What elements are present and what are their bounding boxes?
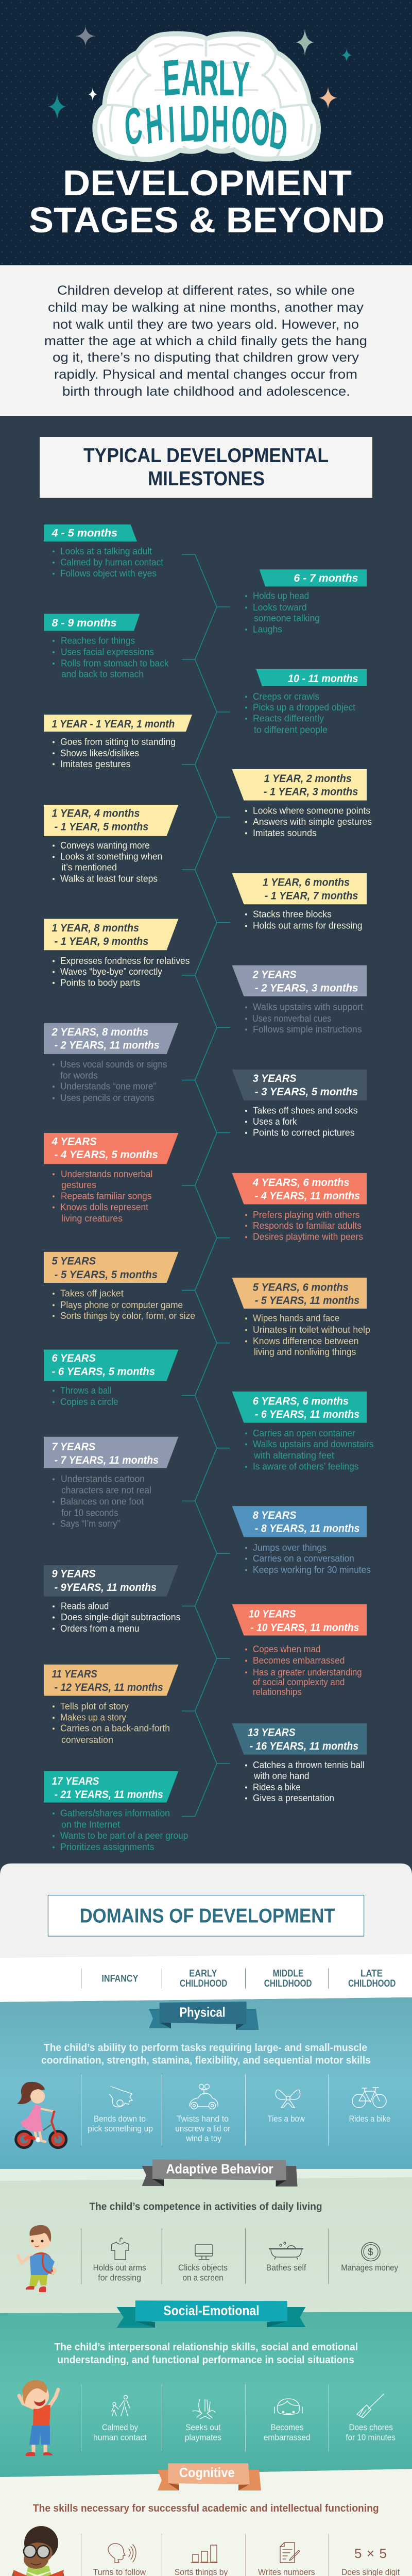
milestone: 4 years 6 months: Desires playtime with peers [253, 1232, 363, 1242]
milestone: 6-7 months: someone talking [254, 613, 320, 623]
milestone: 13 years: with one hand [253, 1771, 309, 1781]
intro text block: og it, there’s no disputing that children grow very [53, 350, 359, 365]
illustration: boy with backpack [18, 2225, 56, 2292]
heading: typical developmental milestones: TYPICAL DEVELOPMENTAL [83, 445, 329, 467]
milestone: 1 year 6 months: 1 YEAR, 6 months [263, 877, 350, 889]
icon: bike [352, 2088, 386, 2108]
milestone: 4 years [44, 1133, 178, 1224]
milestone: 5 years: Sorts things by color, form, or size [60, 1311, 195, 1321]
title: Early Childhood [123, 48, 289, 163]
intro text block: child may be walking at nine months, another may [48, 300, 364, 315]
text: social-emotional description [55, 2342, 358, 2366]
milestone: 3 years [232, 1070, 367, 1138]
milestone: 3 years: 3 YEARS [253, 1073, 297, 1084]
intro text block: birth through late childhood and adolescence. [62, 384, 350, 399]
milestone: 10 years: 10 YEARS [249, 1608, 296, 1620]
milestone: 6 years 6 months: Is aware of others’ feelings [253, 1462, 358, 1472]
milestone: 7 years: - 7 YEARS, 11 months [55, 1454, 159, 1466]
labels: social-emotional milestones: Does chores [349, 2422, 393, 2432]
milestone: 7 years: Balances on one foot [60, 1496, 144, 1506]
milestone: 10-11 months: Reacts differently [253, 713, 324, 723]
milestone: 2 years 8 months: Understands “one more” [60, 1081, 156, 1092]
ribbon: social-emotional: Social-Emotional [163, 2302, 260, 2318]
milestone: 4-5 months [44, 524, 163, 579]
milestone: 5 years [44, 1252, 195, 1321]
milestone: 4-5 months: Calmed by human contact [60, 557, 163, 568]
milestone: 10-11 months: 10 - 11 months [288, 673, 358, 685]
text: social-emotional description: The child’s interpersonal relationship skills, social and emotional [55, 2342, 358, 2353]
labels: physical milestones: Bends down to [94, 2114, 146, 2124]
labels: physical milestones: pick something up [88, 2124, 153, 2133]
milestone: 5 years 6 months: Knows difference between [253, 1336, 358, 1346]
milestone: 1 year - 1 year 1 month: Shows likes/dislikes [60, 748, 139, 758]
ribbon: cognitive [158, 2463, 261, 2490]
milestone: 1 year 2 months: Answers with simple gestures [253, 817, 372, 827]
milestone: 13 years [232, 1723, 367, 1803]
milestone: 4-5 months: 4 - 5 months [51, 528, 117, 539]
labels: adaptive milestones: on a screen [183, 2273, 224, 2282]
text: adaptive description: The child’s competence in activities of daily living [90, 2201, 322, 2213]
milestone: 1 year 6 months: - 1 YEAR, 7 months [265, 890, 358, 902]
milestone: 13 years: Catches a thrown tennis ball [253, 1760, 365, 1770]
milestone: 5 years 6 months: - 5 YEARS, 11 months [255, 1295, 359, 1307]
illustration: cheering boy [19, 2380, 58, 2456]
intro text block: not walk until they are two years old. However, no [53, 317, 359, 332]
milestone: 13 years: Gives a presentation [253, 1793, 334, 1803]
milestone: 17 years: Wants to be part of a peer group [60, 1831, 188, 1841]
milestone: 10-11 months: Picks up a dropped object [253, 702, 355, 713]
milestone: 13 years: Rides a bike [253, 1782, 301, 1792]
milestone: 10-11 months: Creeps or crawls [253, 691, 319, 702]
milestone: 11 years: - 12 YEARS, 11 months [55, 1682, 163, 1693]
intro text block: matter the age at which a child finally gets the hang [44, 334, 367, 348]
milestone: 2 years [232, 965, 367, 1035]
milestone: 6 years 6 months: Carries an open container [253, 1428, 355, 1438]
text: physical description: coordination, strength, stamina, flexibility, and sequential motor skills [41, 2055, 371, 2066]
milestone: 17 years: Gathers/shares information [60, 1808, 170, 1818]
milestone: 2 years 8 months: Uses pencils or crayons [60, 1093, 154, 1103]
milestone: 7 years: for 10 seconds [61, 1507, 118, 1518]
milestone: 6-7 months: Looks toward [253, 602, 307, 613]
milestone: 1 year 4 months: Walks at least four steps [60, 874, 158, 884]
icon: wind-up car [190, 2084, 218, 2109]
column headers: INFANCY [101, 1973, 139, 1984]
illustration: boy reading [9, 2526, 67, 2576]
milestone: 4 years: Knows dolls represent [60, 1202, 148, 1212]
intro text block [0, 265, 412, 416]
icon: bow [276, 2090, 300, 2108]
milestone: 5 years 6 months [232, 1278, 370, 1357]
labels: adaptive milestones: Manages money [341, 2263, 398, 2273]
title: Early Childhood: EARLY [162, 48, 250, 108]
milestone: 4 years: Repeats familiar songs [61, 1191, 151, 1201]
milestone: 2 years: 2 YEARS [252, 969, 297, 981]
milestone: 6 years: 6 YEARS [52, 1352, 96, 1364]
milestone: 4 years 6 months: 4 YEARS, 6 months [252, 1177, 350, 1189]
milestone: 9 years: 9 YEARS [52, 1568, 96, 1580]
milestone: 1 year 8 months: Expresses fondness for relatives [60, 956, 190, 966]
milestone: 4 years: 4 YEARS [52, 1136, 97, 1147]
icon: hands together [193, 2399, 215, 2419]
milestone: 8 years: Keeps working for 30 minutes [253, 1565, 371, 1575]
milestone: 8 years: Carries on a conversation [253, 1553, 354, 1564]
milestone: 13 years: 13 YEARS [248, 1727, 296, 1739]
milestone: 1 year 4 months: Conveys wanting more [60, 840, 150, 851]
panel: typical developmental milestones [0, 416, 412, 1870]
ribbon: physical: Physical [179, 2005, 226, 2020]
milestone: 1 year 6 months [232, 873, 367, 931]
icon: sparkles [48, 26, 352, 120]
milestone: 17 years [44, 1771, 188, 1852]
milestone: 1 year 2 months: Looks where someone points [253, 806, 370, 816]
milestone: 1 year 6 months: Stacks three blocks [253, 909, 332, 919]
milestone: 4 years: gestures [61, 1180, 96, 1190]
milestone: 8 years: 8 YEARS [253, 1510, 297, 1521]
milestone: 11 years: Carries on a back-and-forth [60, 1723, 170, 1734]
text: social-emotional description: understanding, and functional performance in social situations [57, 2354, 354, 2366]
milestone: 5 years 6 months: Wipes hands and face [253, 1313, 339, 1324]
milestone: 4 years: living creatures [61, 1213, 123, 1224]
milestone: 5 years 6 months: Urinates in toilet without help [253, 1325, 370, 1335]
icon: embarrassed face [274, 2399, 302, 2414]
ribbon: social-emotional [116, 2300, 305, 2328]
section: social-emotional [0, 2300, 412, 2477]
milestone: 11 years: Makes up a story [60, 1713, 126, 1723]
milestone: 2 years: - 2 YEARS, 3 months [255, 982, 358, 994]
milestone: 1 year 8 months: - 1 YEAR, 9 months [55, 936, 148, 947]
milestone: 1 year 8 months: Waves “bye-bye” correctly [60, 967, 162, 977]
milestone: 1 year - 1 year 1 month: 1 YEAR - 1 YEAR, 1 month [52, 718, 175, 730]
labels: physical milestones: Rides a bike [349, 2114, 390, 2124]
ribbon: adaptive behavior [142, 2160, 298, 2187]
milestone: 17 years: 17 YEARS [52, 1775, 99, 1787]
milestone: 2 years: Walks upstairs with support [253, 1002, 363, 1012]
milestone: 11 years: Tells plot of story [60, 1701, 129, 1711]
ribbon: adaptive behavior: Adaptive Behavior [166, 2161, 273, 2176]
milestone: 9 years [44, 1565, 180, 1634]
milestone: 1 year 2 months: 1 YEAR, 2 months [264, 773, 352, 785]
milestone: 8-9 months: 8 - 9 months [52, 617, 116, 629]
milestone: 4 years: Understands nonverbal [61, 1169, 152, 1179]
icon: coin [362, 2243, 380, 2261]
milestone: 8-9 months: and back to stomach [61, 669, 144, 680]
milestone: 4 years: - 4 YEARS, 5 months [55, 1149, 158, 1161]
milestone: 3 years: Points to correct pictures [253, 1127, 355, 1138]
heading: typical developmental milestones: MILESTONES [148, 468, 265, 490]
column headers: CHILDHOOD [264, 1978, 312, 1989]
milestone: 17 years: Prioritizes assignments [60, 1842, 154, 1852]
milestone: 17 years: - 21 YEARS, 11 months [55, 1789, 163, 1801]
header panel [0, 0, 412, 265]
milestone: 2 years 8 months: for words [60, 1071, 98, 1081]
milestone: 5 years: Plays phone or computer game [60, 1300, 183, 1310]
panel: domains of development [0, 1863, 412, 2576]
icon: turns to noise [108, 2544, 136, 2563]
milestone: 1 year 4 months: Looks at something when [60, 852, 162, 862]
milestone: 6 years 6 months: - 6 YEARS, 11 months [255, 1409, 359, 1420]
milestone: 1 year 4 months: - 1 YEAR, 5 months [55, 821, 148, 833]
milestone: 11 years: conversation [61, 1735, 113, 1745]
milestone: 4 years 6 months: Prefers playing with others [253, 1210, 359, 1220]
milestone: 7 years: 7 YEARS [52, 1441, 95, 1453]
milestone: 8-9 months: Rolls from stomach to back [61, 658, 169, 668]
title: Development Stages & Beyond [29, 163, 385, 240]
milestone: 13 years: - 16 YEARS, 11 months [250, 1740, 358, 1752]
milestone: 1 year 2 months: Imitates sounds [253, 828, 317, 838]
section: adaptive behavior [0, 2160, 412, 2314]
milestone: 1 year 4 months: 1 YEAR, 4 months [52, 808, 140, 820]
milestone: 2 years: Uses nonverbal cues [252, 1013, 331, 1024]
milestone: 1 year 8 months [44, 919, 190, 988]
milestone: 6 years 6 months: Walks upstairs and downstairs [253, 1439, 374, 1449]
milestone: 1 year 2 months [232, 769, 372, 838]
milestone: 10 years: of social complexity and [253, 1677, 345, 1687]
labels: social-emotional milestones: Becomes [271, 2422, 303, 2432]
milestone: 10 years: Becomes embarrassed [253, 1655, 345, 1666]
milestone: 10 years: - 10 YEARS, 11 months [250, 1622, 359, 1634]
icon: coin: $ [368, 2247, 373, 2258]
milestone: 8 years: - 8 YEARS, 11 months [255, 1523, 359, 1535]
milestone: 6 years: - 6 YEARS, 5 months [52, 1366, 155, 1378]
milestone: 8-9 months [44, 614, 169, 680]
milestone: 3 years: - 3 YEARS, 5 months [255, 1086, 358, 1098]
milestone: 10-11 months [245, 669, 367, 735]
labels: cognitive milestones [93, 2567, 400, 2576]
intro text block: Children develop at different rates, so while one [57, 283, 355, 298]
milestone: 2 years 8 months: - 2 YEARS, 11 months [55, 1040, 160, 1052]
milestone: 7 years: characters are not real [61, 1485, 151, 1496]
column headers: CHILDHOOD [180, 1978, 227, 1989]
column headers: LATE [360, 1969, 383, 1979]
labels: physical milestones [88, 2114, 390, 2143]
milestone: 4 years 6 months: - 4 YEARS, 11 months [255, 1190, 360, 1202]
labels: adaptive milestones: for dressing [98, 2273, 141, 2282]
labels: physical milestones: Twists hand to [177, 2114, 229, 2124]
milestone: 4-5 months: Follows object with eyes [60, 568, 157, 579]
icon: shirt [111, 2238, 129, 2260]
icon: broom [357, 2394, 384, 2418]
timeline connector [182, 554, 230, 1816]
labels: social-emotional milestones [93, 2422, 396, 2442]
milestone: 6 years [44, 1350, 178, 1407]
icon: monitor [195, 2245, 213, 2260]
milestone: 4 years 6 months: Responds to familiar adults [253, 1221, 362, 1231]
milestone: 8 years: Jumps over things [253, 1543, 327, 1553]
text: physical description [41, 2042, 371, 2066]
milestone: 6 years 6 months [232, 1392, 374, 1472]
labels: physical milestones: wind a toy [185, 2133, 221, 2143]
milestone: 5 years: Takes off jacket [60, 1288, 124, 1298]
heading: typical developmental milestones [40, 437, 372, 498]
milestone: 1 year 6 months: Holds out arms for dressing [253, 921, 363, 931]
milestone: 10 years: Has a greater understanding [253, 1667, 362, 1677]
milestone: 5 years 6 months: 5 YEARS, 6 months [253, 1281, 349, 1293]
milestone: 8-9 months: Reaches for things [61, 636, 135, 646]
title: Development Stages & Beyond: STAGES & BEYOND [29, 200, 385, 240]
milestone: 9 years: Does single-digit subtractions [61, 1612, 180, 1622]
milestone: 5 years 6 months: living and nonliving things [254, 1347, 356, 1357]
milestone: 3 years: Uses a fork [253, 1116, 297, 1127]
column headers [0, 1954, 412, 2002]
milestone: 1 year - 1 year 1 month: Imitates gestures [60, 759, 131, 769]
milestone: 7 years [44, 1437, 178, 1529]
milestone: 6 years 6 months: with alternating feet [253, 1450, 334, 1461]
milestone: 8-9 months: Uses facial expressions [61, 647, 154, 657]
milestone: 6-7 months: Laughs [253, 624, 282, 635]
milestone: 1 year 4 months [44, 805, 178, 884]
icon: parent and child [112, 2396, 130, 2416]
milestone: 6-7 months: 6 - 7 months [294, 572, 358, 584]
milestone: 6 years: Copies a circle [60, 1397, 118, 1407]
milestone: 9 years: - 9YEARS, 11 months [55, 1582, 157, 1594]
section: cognitive [0, 2463, 412, 2576]
column headers: CHILDHOOD [348, 1978, 396, 1989]
milestone: 9 years: Reads aloud [61, 1601, 109, 1612]
milestone: 6-7 months [245, 569, 367, 635]
icon: sized bars [191, 2545, 217, 2563]
milestone: 6 years 6 months: 6 YEARS, 6 months [253, 1395, 349, 1407]
milestone: 1 year 8 months: 1 YEAR, 8 months [52, 922, 139, 934]
milestone: 1 year 8 months: Points to body parts [60, 977, 140, 988]
ribbon: physical [149, 2002, 259, 2030]
text: cognitive description: The skills necessary for successful academic and intellectual functioning [33, 2503, 379, 2514]
milestone: 2 years 8 months: 2 YEARS, 8 months [52, 1026, 148, 1038]
column headers: MIDDLE [273, 1969, 303, 1979]
milestone: 3 years: Takes off shoes and socks [253, 1106, 357, 1116]
icon: multiplication: 5 × 5 [354, 2546, 387, 2561]
milestone: 2 years: Follows simple instructions [253, 1024, 362, 1035]
section: physical [0, 1997, 412, 2170]
milestone: 17 years: on the Internet [61, 1820, 120, 1830]
milestone: 4 years 6 months [232, 1173, 367, 1242]
labels: adaptive milestones: Clicks objects [178, 2263, 228, 2273]
labels: social-emotional milestones: human contact [93, 2432, 147, 2442]
heading: domains of development [48, 1895, 364, 1936]
milestone: 11 years [44, 1665, 178, 1745]
labels: social-emotional milestones: for 10 minutes [346, 2432, 396, 2442]
column headers: EARLY [189, 1969, 217, 1979]
milestone: 1 year 2 months: - 1 YEAR, 3 months [264, 786, 358, 798]
icon: bathtub [269, 2242, 303, 2259]
labels: social-emotional milestones: embarrassed [264, 2432, 311, 2442]
icon: document and pencil [280, 2543, 300, 2563]
labels: social-emotional milestones: Calmed by [102, 2422, 138, 2432]
milestone: 6 years: Throws a ball [60, 1385, 112, 1396]
milestone: 1 year - 1 year 1 month [44, 715, 192, 769]
milestone: 7 years: Says “I’m sorry” [60, 1518, 120, 1529]
labels: social-emotional milestones: playmates [185, 2432, 221, 2442]
labels: physical milestones: unscrew a lid or [175, 2124, 231, 2133]
illustration: girl on bike [14, 2082, 67, 2149]
labels: adaptive milestones [93, 2263, 398, 2282]
milestone: 10 years [232, 1604, 367, 1697]
labels: social-emotional milestones: Seeks out [185, 2422, 221, 2432]
milestone: 2 years 8 months: Uses vocal sounds or signs [60, 1059, 167, 1070]
milestone: 8 years [232, 1506, 371, 1575]
labels: adaptive milestones: Bathes self [266, 2263, 306, 2273]
milestone: 5 years: - 5 YEARS, 5 months [55, 1269, 158, 1281]
milestone: 1 year - 1 year 1 month: Goes from sitting to standing [60, 737, 176, 747]
milestone: 4-5 months: Looks at a talking adult [60, 546, 152, 556]
milestone: 10 years: Copes when mad [253, 1644, 320, 1654]
icon: bends down [109, 2087, 132, 2107]
milestone: 5 years: 5 YEARS [52, 1255, 96, 1267]
milestone: 11 years: 11 YEARS [52, 1668, 97, 1680]
heading: domains of development: DOMAINS OF DEVELOPMENT [80, 1905, 335, 1927]
milestone: 1 year 4 months: it’s mentioned [61, 862, 117, 873]
milestone: 9 years: Orders from a menu [60, 1623, 139, 1634]
ribbon: cognitive: Cognitive [179, 2465, 235, 2480]
intro text block: rapidly. Physical and mental changes occur from [54, 367, 357, 382]
milestone: 7 years: Understands cartoon [61, 1474, 145, 1484]
labels: adaptive milestones: Holds out arms [93, 2263, 146, 2273]
milestone: 2 years 8 months [44, 1023, 178, 1103]
title: Early Childhood: CHILDHOOD [123, 93, 289, 163]
milestone: 10-11 months: to different people [254, 725, 328, 735]
title: Development Stages & Beyond: DEVELOPMENT [63, 163, 352, 203]
labels: physical milestones: Ties a bow [267, 2114, 305, 2124]
milestone: 10 years: relationships [253, 1687, 302, 1697]
text: physical description: The child’s ability to perform tasks requiring large- and small-muscle [44, 2042, 367, 2054]
icon: brain [92, 31, 321, 162]
milestone: 6-7 months: Holds up head [253, 590, 309, 601]
